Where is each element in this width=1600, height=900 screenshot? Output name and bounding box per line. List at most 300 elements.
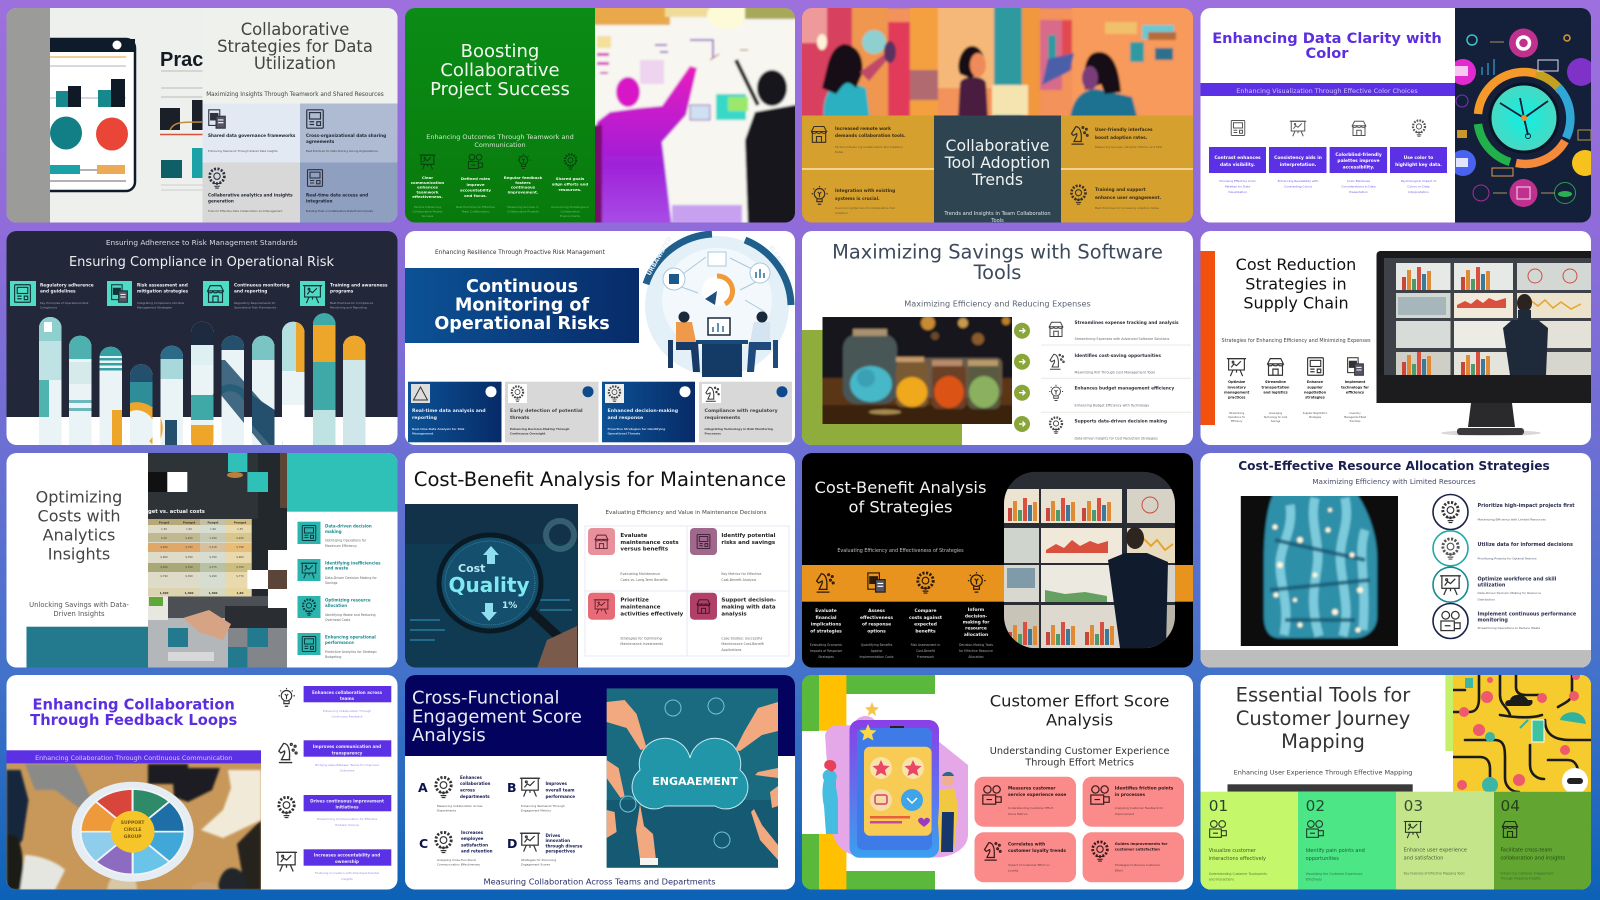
item headings: Compare xyxy=(914,608,937,614)
image: bottles with lights xyxy=(1235,490,1405,650)
item headings: making xyxy=(325,529,342,534)
purple boxes: interpretation. xyxy=(1280,162,1317,168)
card: early detection xyxy=(505,382,598,442)
image: analyst with cost table: 1.30 xyxy=(161,527,167,531)
icon tiles xyxy=(10,281,325,306)
box notes: Bridging Gaps Between Teams for Improved xyxy=(315,763,379,767)
icons xyxy=(1227,358,1363,376)
title banner: Continuous xyxy=(466,277,578,297)
item: informed decisions xyxy=(1433,531,1573,566)
subtitle: Enhancing User Experience Through Effective Mapping xyxy=(1234,768,1412,776)
column 02: Visualizing the Customer Experience xyxy=(1306,872,1363,876)
title: Tools xyxy=(973,261,1021,284)
left gold panels xyxy=(802,116,934,222)
item: integration: systems is crucial. xyxy=(835,196,880,202)
title: Enhancing Collaboration xyxy=(33,696,235,714)
title: Through Feedback Loops xyxy=(30,712,237,729)
tile glyphs xyxy=(15,285,322,303)
title: Cost-Effective Resource Allocation Strategies xyxy=(1238,459,1550,473)
card: decision-making xyxy=(602,382,695,442)
box notes: Problem Solving xyxy=(335,823,359,827)
item notes: Engagement Metrics xyxy=(521,808,551,812)
subtitle bar xyxy=(1200,83,1456,96)
purple boxes: Use color to xyxy=(1404,155,1433,161)
item: evaluate costs: versus benefits xyxy=(620,547,669,553)
item headings: implications xyxy=(811,622,841,628)
letter C: C xyxy=(419,836,428,851)
card: real-time data: Management xyxy=(412,432,434,436)
column 02 xyxy=(1298,792,1396,890)
box headings: Increases accountability and xyxy=(314,852,380,858)
key points: Clear xyxy=(422,175,433,180)
item headings: resource xyxy=(965,625,987,631)
subtitle: Evaluating Efficiency and Value in Maintenance Decisions xyxy=(606,510,767,516)
column 04 xyxy=(1494,792,1591,890)
title banner: Monitoring of xyxy=(455,296,590,316)
card: guides improvements: Effort xyxy=(1115,868,1124,872)
right gold panels xyxy=(1061,116,1193,222)
image: analyst with cost table: Pranget xyxy=(234,520,247,524)
item: informed decisions: Prioritizing Projects for Optimal Returns xyxy=(1478,556,1537,560)
title: Costs with xyxy=(38,506,120,526)
item notes: Cost-Benefit xyxy=(916,649,936,653)
item notes: Management Best xyxy=(1344,416,1366,419)
item: risks and savings: Cost-Benefit Analysis xyxy=(721,578,756,582)
image: analyst with cost table: Funget xyxy=(208,520,219,524)
card: real-time data: Real-time data analysis and xyxy=(412,408,486,414)
image: hands around engagement xyxy=(607,688,778,868)
card: decision-making: Enhanced decision-making xyxy=(608,408,678,414)
card: early detection: Enhancing Decision-Making Through xyxy=(510,427,569,431)
image: analyst with cost table: $.790 xyxy=(160,574,168,578)
card: loyalty trends: Loyalty xyxy=(1008,868,1019,872)
item notes: Management Strategies xyxy=(137,306,172,310)
item headings: employee xyxy=(461,836,484,841)
item headings: Enhance xyxy=(1307,380,1324,384)
card: loyalty trends: Impact of Customer Effort on xyxy=(1008,863,1050,867)
item headings: costs against xyxy=(909,615,942,621)
item notes: Strategies for Improving xyxy=(521,858,556,862)
image: women and colourful charts xyxy=(802,8,1193,116)
item notes: Practices xyxy=(1350,420,1361,423)
item headings: Regulatory adherence xyxy=(40,282,94,288)
subtitle: Enhancing Outcomes Through Teamwork and xyxy=(426,133,574,141)
item: integration: Adoption xyxy=(835,211,848,215)
card: friction points: in processes xyxy=(1115,792,1145,798)
card: early detection: threats xyxy=(510,415,529,421)
card: decision-making: Operational Threats xyxy=(608,432,640,436)
panel: Cross-Functional Engagement Score Analysis xyxy=(405,675,795,890)
right title area xyxy=(388,8,398,18)
supporting notes: Interpretation xyxy=(1408,190,1429,194)
item: high-impact: Prioritize high-impact projects first xyxy=(1478,503,1575,509)
column 04: Facilitate cross-team xyxy=(1500,848,1552,854)
item: interfaces xyxy=(1072,127,1163,149)
quadrant: collaborative analytics: Collaborative analytics and insights xyxy=(208,192,293,198)
title: Supply Chain xyxy=(1243,293,1349,312)
illustration: phone with ratings xyxy=(822,702,968,858)
image: analyst with cost table: $.700 xyxy=(185,565,193,569)
quadrant: cross-organizational sharing: agreements xyxy=(306,139,335,144)
quadrant: collaborative analytics: generation xyxy=(208,198,234,204)
card: friction points: Analyzing Customer Feedback for xyxy=(1115,806,1164,810)
box notes: Enhancing Collaboration Through xyxy=(323,709,371,713)
box notes: Fostering Innovation with Interdepartmental xyxy=(315,871,379,875)
icons xyxy=(436,777,540,853)
purple boxes: data visibility. xyxy=(1220,162,1255,168)
column 01: Understanding Customer Touchpoints xyxy=(1209,872,1267,876)
title: Cost Reduction xyxy=(1236,255,1356,274)
item: support decision-making: analysis xyxy=(721,612,747,618)
supporting notes: Success xyxy=(422,214,434,218)
item headings: negotiation xyxy=(1304,390,1327,394)
card: service ease: Measures customer xyxy=(1008,786,1056,792)
item headings: and reporting xyxy=(234,288,267,294)
image: analyst with cost table: $.575 xyxy=(209,565,217,569)
image: clock dashboard xyxy=(1450,8,1598,223)
box notes: Streamlining Communication for Effective xyxy=(317,817,377,821)
purple boxes: accessibility. xyxy=(1343,164,1375,170)
image: analyst with cost table: Pranget xyxy=(183,520,196,524)
box notes: Outcomes xyxy=(340,768,355,772)
card: guides improvements: Guides improvements for xyxy=(1115,842,1168,846)
panel: Enhancing Data Clarity with Color xyxy=(1200,8,1598,223)
bottom caption: Measuring Collaboration Across Teams and Departments xyxy=(484,876,715,886)
item: interfaces: boost adoption rates. xyxy=(1095,135,1148,141)
image: analyst with cost table: $.50 xyxy=(161,536,167,540)
teal header block xyxy=(287,453,398,512)
item notes: Risk Assessment in xyxy=(911,643,940,647)
supporting notes: Contrasting Colors xyxy=(1284,184,1312,188)
image: magnifier cost quality: Quality xyxy=(448,573,530,597)
title: Engagement Score xyxy=(412,706,582,728)
card: friction points: Improvement xyxy=(1115,812,1135,816)
supporting notes: Best Practices for Effective xyxy=(456,205,495,209)
card: decision-making: Proactive Strategies for Identifying xyxy=(608,427,665,431)
title: Color xyxy=(1306,45,1349,62)
central title panel: Collaborative xyxy=(946,136,1049,155)
item headings: Drives xyxy=(546,833,561,838)
teal base block xyxy=(26,627,148,668)
title: Strategies in xyxy=(1245,274,1347,293)
column 04: 04 xyxy=(1500,797,1520,815)
card: compliance: Integrating Technology in Risk Monitoring xyxy=(704,427,773,431)
subtitle bar: Enhancing Visualization Through Effective Color Choices xyxy=(1236,87,1418,95)
panel: Collaborative Tool Adoption Trends xyxy=(797,3,1197,224)
image: phone dashboard xyxy=(50,38,136,192)
column 02: 02 xyxy=(1306,797,1325,815)
item notes: for Effective Resource xyxy=(959,649,993,653)
item notes: Quantifying Benefits xyxy=(861,643,893,647)
item: interfaces: Measuring Success: Adoption Metrics and KPIs xyxy=(1095,145,1163,149)
item headings: overall team xyxy=(546,788,575,792)
image: analyst with cost table: $.518 xyxy=(209,545,217,549)
item notes: Savings xyxy=(1271,420,1281,423)
key points: teamwork xyxy=(417,189,439,194)
box headings: ownership xyxy=(335,859,359,864)
image: hands around engagement: ENGAAEMENT xyxy=(652,775,738,788)
panel: Customer Effort Score Analysis xyxy=(802,675,1193,890)
box headings: teams xyxy=(340,696,355,701)
image: analyst with cost table: $.700 xyxy=(209,555,217,559)
key points: communication xyxy=(411,180,444,185)
item notes: Compliance xyxy=(40,306,57,310)
item notes: Framework xyxy=(917,655,934,659)
item headings: Continuous monitoring xyxy=(234,282,290,288)
item headings: allocation xyxy=(325,603,347,608)
item: remote work: Increased remote work xyxy=(835,126,891,132)
title: Essential Tools for xyxy=(1236,684,1411,706)
item headings: Evaluate xyxy=(815,608,837,614)
supporting notes: Color Blindness xyxy=(1347,179,1371,183)
item headings: Streamline xyxy=(1265,380,1287,384)
image: piggy bank jars xyxy=(820,315,1015,427)
key points: accountability xyxy=(460,188,492,192)
image: analyst with cost table: 1.35 xyxy=(237,527,243,531)
item headings: performance xyxy=(325,640,354,645)
subtitle: Strategies for Enhancing Efficiency and Minimizing Expenses xyxy=(1221,338,1371,344)
card: service ease: Understanding Customer Effort xyxy=(1008,806,1054,810)
subtitle: Enhancing Resilience Through Proactive Risk Management xyxy=(435,250,606,256)
column 03: Enhance user experience xyxy=(1404,848,1467,854)
item notes: Enhancing Teamwork Through xyxy=(521,804,565,808)
card: guides improvements xyxy=(1083,832,1184,882)
panel: Cost-Benefit Analysis of Strategies xyxy=(802,453,1193,668)
image: analyst with cost table: Forget xyxy=(159,520,170,524)
item notes: Allocation xyxy=(968,655,984,659)
image: analyst with cost table: 1,300 xyxy=(185,591,193,595)
item notes: Operations for xyxy=(1228,416,1245,419)
image: support circle on floor xyxy=(6,764,261,898)
item headings: expected xyxy=(914,622,937,628)
card: real-time data: reporting xyxy=(412,415,437,421)
item notes: Measuring Collaboration Across xyxy=(437,804,483,808)
column 04: Through Mapping Insights xyxy=(1500,876,1541,880)
item: training: Training and support xyxy=(1095,187,1146,193)
card: decision-making: and response xyxy=(608,415,643,421)
item headings: strategies xyxy=(1305,396,1325,400)
item: prioritize: activities effectively xyxy=(620,612,684,618)
purple boxes: palettes improve xyxy=(1337,158,1380,164)
item: support decision-making xyxy=(690,593,776,652)
key points: improve xyxy=(467,182,485,187)
supporting notes: Enhancing Readability with xyxy=(1278,179,1318,183)
subtitle bar xyxy=(6,750,261,764)
image: analyst with cost table: $.790 xyxy=(236,545,244,549)
card: service ease: service experience ease xyxy=(1008,792,1066,798)
purple boxes: highlight key data. xyxy=(1395,162,1442,168)
image: Prac poster xyxy=(160,52,202,190)
key points: Defined roles xyxy=(461,176,491,181)
card: friction points xyxy=(1083,777,1184,827)
key points: Shared goals xyxy=(556,176,585,181)
quadrant: collaborative analytics xyxy=(202,162,300,222)
purple boxes: Colorblind-friendly xyxy=(1335,152,1382,158)
item headings: Enhances budget management efficiency xyxy=(1074,386,1174,392)
quadrant: real-time access: Building Trust in Collaborative Data Environments xyxy=(306,209,374,213)
column 04: collaboration and insights xyxy=(1500,856,1566,862)
item headings: satisfaction xyxy=(461,842,488,848)
card: loyalty trends: customer loyalty trends xyxy=(1008,848,1066,854)
purple boxes: Consistency aids in xyxy=(1274,155,1322,161)
image: magnifier cost quality: Cost xyxy=(458,562,485,575)
item notes: Impacts of Response xyxy=(810,649,842,653)
image: analyst with cost table: 1.90 xyxy=(210,527,216,531)
item: training: enhance user engagement. xyxy=(1095,195,1162,201)
item headings: across xyxy=(460,788,475,792)
card: guides improvements: Strategies to Reduce Customer xyxy=(1115,863,1161,867)
item: evaluate costs: Evaluating Maintenance xyxy=(620,572,660,576)
column 01: 01 xyxy=(1209,797,1228,815)
item: continuous monitoring xyxy=(1433,604,1577,638)
quadrant: cross-organizational sharing xyxy=(300,104,398,162)
subtitle: Driven Insights xyxy=(53,610,105,618)
supporting notes: Overcoming Challenges in xyxy=(551,205,589,209)
image: Prac poster: Practical xyxy=(160,49,243,71)
panel: Optimizing Costs with Analytics Insights xyxy=(6,453,398,668)
image: analyst with cost table: $.500 xyxy=(160,565,168,569)
item headings: innovation xyxy=(546,838,570,843)
arrow glyphs xyxy=(1019,328,1025,426)
item headings: Streamlines expense tracking and analysis xyxy=(1074,320,1179,326)
box headings: Enhances collaboration across xyxy=(312,690,383,695)
item headings: financial xyxy=(815,615,837,621)
quadrant: cross-organizational sharing: Best Practices for Data Sharing Among Organizations xyxy=(306,149,378,153)
title: Customer Effort Score xyxy=(990,692,1169,710)
item notes: Strategies xyxy=(1309,416,1322,419)
card: compliance: requirements xyxy=(704,415,740,421)
key points: continuous xyxy=(511,185,536,190)
card: loyalty trends xyxy=(974,832,1076,882)
subtitle: Understanding Customer Experience xyxy=(990,746,1169,757)
green and yellow frame xyxy=(802,675,935,890)
box headings: Drives continuous improvement xyxy=(310,798,384,804)
title: Collaborative xyxy=(440,60,560,81)
image: analyst with cost table: 1,400 xyxy=(160,591,168,595)
item: informed decisions: Utilize data for informed decisions xyxy=(1478,542,1573,548)
item headings: programs xyxy=(330,288,354,294)
item notes: Decision-Making Tools xyxy=(959,643,993,647)
card: loyalty trends: Correlates with xyxy=(1008,842,1045,848)
letter A: A xyxy=(418,780,428,795)
column 03 xyxy=(1396,792,1494,890)
central title panel: Tools xyxy=(990,218,1004,224)
item notes: Maximizing ROI Through Cost Management Tools xyxy=(1074,371,1155,375)
title: Insights xyxy=(48,545,110,564)
item: workforce: Data-Driven Decision Making for Resource xyxy=(1478,591,1541,595)
image: analyst with cost table: $.400 xyxy=(160,545,168,549)
item notes: Data-Driven Decision Making for xyxy=(325,576,377,580)
orange band xyxy=(802,565,1193,602)
supporting notes: Palettes for Data xyxy=(1225,184,1250,188)
item: prioritize: Prioritize xyxy=(620,598,649,604)
column 04: Enhancing Customer Engagement xyxy=(1500,872,1554,876)
icons xyxy=(276,688,297,872)
image: analyst with cost table: $.290 xyxy=(209,574,217,578)
image: analyst with cost table: 1.390 xyxy=(209,536,217,540)
image: analyst with cost table: 1,80 xyxy=(237,591,244,595)
subtitle: Unlocking Savings with Data- xyxy=(29,601,129,609)
item notes: Against xyxy=(871,649,883,653)
box notes: Insights xyxy=(341,877,353,881)
supporting notes: Measuring Success in xyxy=(507,205,539,209)
title: Boosting xyxy=(461,41,539,62)
quadrant: collaborative analytics: Tools for Effective Data Collaboration and Management xyxy=(207,209,282,213)
title: Collaborative xyxy=(241,20,349,39)
panel: Boosting Collaborative Project Success xyxy=(405,1,800,228)
panel: Continuous Monitoring of Operational Risks xyxy=(405,231,795,445)
image: analyst with cost table: $.900 xyxy=(160,555,168,559)
image: analyst with cost table: get vs. actual costs xyxy=(148,509,205,515)
column 02: Effectively xyxy=(1306,878,1322,882)
item headings: and logistics xyxy=(1263,390,1288,394)
item headings: perspectives xyxy=(546,848,576,854)
item notes: Best Practices for Compliance xyxy=(330,301,373,305)
title: Enhancing Data Clarity with xyxy=(1212,30,1442,47)
key points: and focus. xyxy=(464,193,487,198)
image: analyst in front of charts xyxy=(1004,472,1175,649)
image: analyst with cost table: 1,300 xyxy=(209,591,217,595)
item notes: Budgeting xyxy=(325,655,341,659)
image: people at whiteboard xyxy=(595,8,795,222)
panel: Cost-Effective Resource Allocation Strategies xyxy=(1200,453,1591,668)
item headings: Training and awareness xyxy=(330,282,388,288)
key points: improvement. xyxy=(508,189,539,194)
item notes: Departments xyxy=(437,808,456,812)
column 01 xyxy=(1200,792,1298,890)
quadrant: shared data governance: Shared data governance frameworks xyxy=(208,133,296,138)
item: continuous monitoring: Implement continuous performance xyxy=(1478,612,1577,618)
supporting notes: Considerations in Data xyxy=(1341,184,1376,188)
key points: align efforts and xyxy=(552,182,588,186)
title: Analysis xyxy=(412,725,486,746)
card: guides improvements: customer satisfaction xyxy=(1115,848,1160,852)
item headings: departments xyxy=(460,794,490,799)
item headings: supplier xyxy=(1307,385,1323,389)
item headings: Enhancing operational xyxy=(325,635,376,640)
item: interfaces: User-friendly interfaces xyxy=(1095,127,1153,133)
supporting notes: Team Collaboration xyxy=(461,210,490,214)
item: workforce: Optimize workforce and skill xyxy=(1478,576,1557,582)
item headings: of response xyxy=(862,622,891,628)
item: remote work: Rates xyxy=(835,150,844,154)
card: early detection: Early detection of potential xyxy=(510,408,583,414)
item: support decision-making: Support decision- xyxy=(721,598,776,604)
item notes: Overhead Costs xyxy=(325,618,351,622)
item: integration: Overcoming Barriers to Collaborative Tool xyxy=(835,206,895,210)
item headings: allocation xyxy=(964,632,988,638)
subtitle: Communication xyxy=(474,141,526,149)
card: service ease xyxy=(974,777,1076,827)
item headings: Assess xyxy=(868,608,885,614)
item headings: Inform xyxy=(968,607,985,613)
item headings: and retention xyxy=(461,848,493,854)
item headings: mitigation strategies xyxy=(137,288,189,294)
title: Cross-Functional xyxy=(412,688,560,708)
item: integration xyxy=(812,186,895,215)
item headings: management xyxy=(1224,390,1250,394)
title: Ensuring Compliance in Operational Risk xyxy=(69,255,334,270)
item: risks and savings: risks and savings xyxy=(721,540,776,546)
card: compliance xyxy=(699,382,792,442)
item: prioritize: Strategies for Optimizing xyxy=(620,636,662,640)
supporting notes: Environments xyxy=(560,214,580,218)
title: Project Success xyxy=(430,79,570,100)
image: support circle on floor: SUPPORT xyxy=(121,820,145,826)
central title panel: Trends xyxy=(971,170,1023,189)
panel: Cost-Benefit Analysis for Maintenance xyxy=(405,453,795,668)
quadrant: real-time access: integration xyxy=(306,198,332,204)
